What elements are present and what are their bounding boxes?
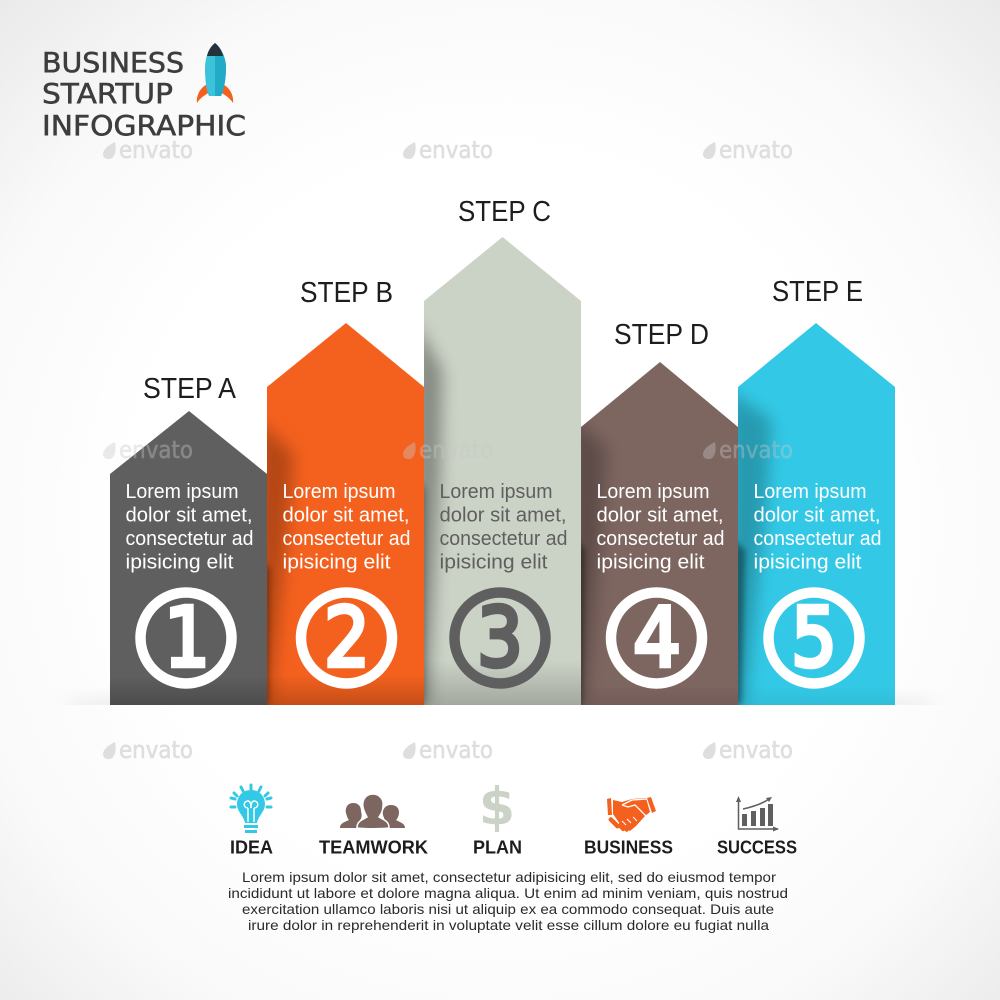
number 5: 5 [791, 591, 837, 686]
icon labels: BUSINESS [584, 838, 673, 858]
step A text [126, 481, 254, 574]
step E text: consectetur ad [754, 528, 882, 550]
watermarks: envato [119, 136, 193, 164]
arrow: step E [728, 323, 895, 705]
number 4: 4 [633, 591, 681, 686]
arrow: step D [572, 362, 738, 705]
step D text [596, 481, 724, 574]
step E text [754, 481, 882, 574]
step B text: dolor sit amet, [282, 504, 410, 526]
icon labels: SUCCESS [717, 838, 797, 858]
watermarks [103, 136, 793, 764]
step B text [282, 481, 410, 574]
number 4 [611, 591, 702, 686]
description text: irure dolor in reprehenderit in voluptate velit esse cillum dolore eu fugiat nulla [248, 917, 769, 933]
step C text: consectetur ad [440, 528, 568, 550]
number 3: 3 [477, 591, 523, 686]
number 2: 2 [324, 591, 370, 686]
arrow: step A [110, 411, 267, 705]
icon: growth chart [736, 796, 779, 832]
icon labels: IDEA [230, 838, 273, 858]
watermarks over arrows: envato [119, 436, 193, 464]
watermarks: envato [719, 136, 793, 164]
icon: light bulb [231, 785, 271, 833]
number 1 [140, 591, 232, 686]
description text: incididunt ut labore et dolore magna aliqua. Ut enim ad minim veniam, quis nostrud [228, 885, 788, 901]
step labels: STEP A [143, 373, 237, 405]
watermarks over arrows: envato [719, 436, 793, 464]
icon labels: TEAMWORK [319, 838, 428, 858]
step C text: dolor sit amet, [440, 504, 566, 526]
step B text: consectetur ad [282, 528, 410, 550]
icon: team [340, 794, 405, 829]
step A text: Lorem ipsum [126, 481, 238, 503]
step B text: Lorem ipsum [282, 481, 396, 503]
step E text: dolor sit amet, [754, 504, 880, 526]
step C text [440, 481, 568, 574]
arrow: step B [258, 323, 424, 705]
step labels: STEP E [772, 276, 863, 308]
step labels: STEP C [458, 196, 551, 228]
number 1: 1 [164, 591, 210, 686]
watermarks: envato [719, 736, 793, 764]
step B text: ipisicing elit [282, 552, 391, 574]
step A text: consectetur ad [126, 528, 254, 550]
floor shadow [82, 698, 918, 705]
icon labels: PLAN [473, 838, 522, 858]
title [42, 47, 246, 142]
icon: rocket [197, 43, 233, 103]
watermarks: envato [119, 736, 193, 764]
title: STARTUP [42, 78, 173, 110]
step C text: ipisicing elit [440, 552, 548, 574]
step D text: ipisicing elit [596, 552, 705, 574]
step A text: dolor sit amet, [126, 504, 252, 526]
number 3 [454, 591, 546, 686]
icon: dollar: $ [479, 778, 515, 838]
number 2 [301, 591, 392, 686]
description text: exercitation ullamco laboris nisi ut aliquip ex ea commodo consequat. Duis aute [242, 901, 774, 917]
step labels: STEP D [614, 319, 709, 351]
arrow: step C [414, 237, 581, 705]
watermarks: envato [419, 736, 493, 764]
step A text: ipisicing elit [126, 552, 234, 574]
title: BUSINESS [42, 47, 184, 79]
watermarks over arrows [103, 436, 793, 464]
step D text: consectetur ad [596, 528, 724, 550]
step labels [143, 196, 863, 405]
step E text: Lorem ipsum [754, 481, 866, 503]
watermarks: envato [419, 136, 493, 164]
watermarks over arrows: envato [419, 436, 493, 464]
icon labels [230, 838, 797, 858]
number 5 [768, 591, 860, 686]
step D text: dolor sit amet, [596, 504, 724, 526]
step E text: ipisicing elit [754, 552, 862, 574]
description text: Lorem ipsum dolor sit amet, consectetur adipisicing elit, sed do eiusmod tempor [242, 869, 776, 885]
title: INFOGRAPHIC [42, 110, 246, 142]
step labels: STEP B [300, 277, 393, 309]
description text [228, 869, 788, 933]
icon: handshake [607, 797, 656, 833]
step D text: Lorem ipsum [596, 481, 710, 503]
step C text: Lorem ipsum [440, 481, 552, 503]
